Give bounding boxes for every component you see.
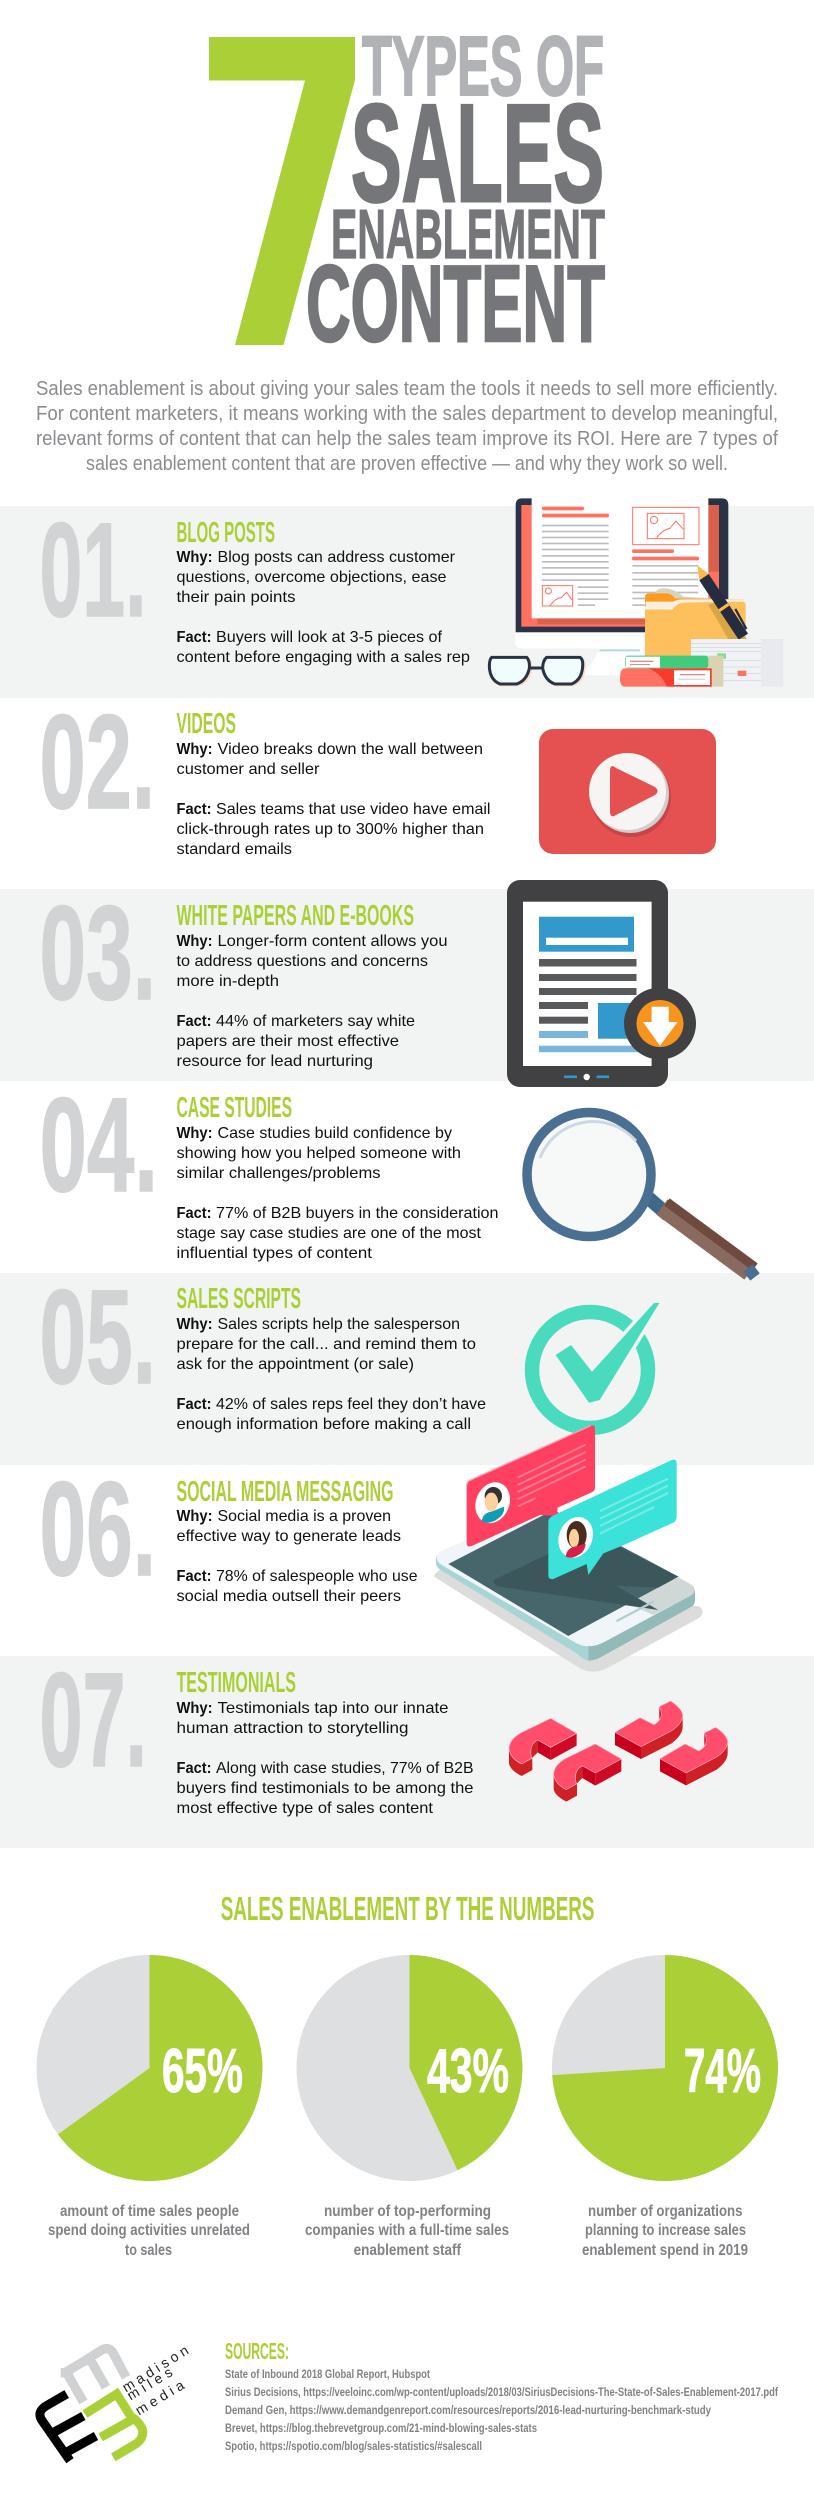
fact text: Fact: xyxy=(176,1205,212,1222)
heading: white papers and e-books: WHITE PAPERS AND E-BOOKS xyxy=(176,900,414,932)
why text: Why: xyxy=(176,1508,212,1525)
heading: sales scripts: SALES SCRIPTS xyxy=(176,1283,301,1315)
icon: blog monitor with folder, books and glasses xyxy=(489,497,783,687)
title line: enablement: ENABLEMENT xyxy=(331,195,605,273)
why text: Social media is a proven xyxy=(218,1508,391,1525)
pie chart: 43%: 43% xyxy=(427,2037,509,2106)
heading: testimonials: TESTIMONIALS xyxy=(176,1667,296,1699)
fact text: standard emails xyxy=(176,841,292,858)
caption: 74%: number of organizations xyxy=(588,2203,743,2220)
why text xyxy=(176,1508,401,1545)
caption: 43% xyxy=(305,2203,509,2259)
why text xyxy=(176,1700,449,1737)
why text xyxy=(176,549,456,606)
why text: Case studies build confidence by xyxy=(218,1125,452,1142)
icon: video play button xyxy=(539,729,716,854)
panel: blog posts xyxy=(40,496,470,666)
red chat bubble xyxy=(467,1425,595,1546)
panel: testimonials xyxy=(40,1646,474,1817)
sources: State of Inbound 2018 Global Report, Hubspot xyxy=(225,2369,430,2381)
number 01: 01. xyxy=(40,496,146,645)
fact text: social media outsell their peers xyxy=(176,1588,401,1605)
icon: check mark in circle xyxy=(532,1303,659,1428)
why text: Why: xyxy=(176,1700,212,1717)
why text xyxy=(176,1125,461,1182)
why text: effective way to generate leads xyxy=(176,1528,401,1545)
fact text: most effective type of sales content xyxy=(176,1800,434,1817)
intro text: Sales enablement is about giving your sales team the tools it needs to sell more efficiently. xyxy=(36,378,778,400)
intro text: For content marketers, it means working with the sales department to develop meaningful, xyxy=(36,403,778,425)
number 03: 03. xyxy=(40,879,156,1028)
number 07: 07. xyxy=(40,1646,147,1795)
why text: showing how you helped someone with xyxy=(176,1145,461,1162)
caption: 65% xyxy=(48,2203,250,2259)
logo: madison miles media: madison xyxy=(119,2342,191,2395)
why text: to address questions and concerns xyxy=(176,953,428,970)
why text: Why: xyxy=(176,549,212,566)
sources: Demand Gen, https://www.demandgenreport.com/resources/reports/2016-lead-nurturing-benchmark-study xyxy=(225,2405,712,2417)
why text: similar challenges/problems xyxy=(176,1165,380,1182)
sources xyxy=(225,2338,778,2453)
fact text xyxy=(176,1396,486,1433)
caption: 65%: spend doing activities unrelated xyxy=(48,2222,250,2239)
fact text: Fact: xyxy=(176,629,212,646)
title numeral 7 xyxy=(209,37,355,345)
why text xyxy=(176,741,483,778)
fact text: stage say case studies are one of the most xyxy=(176,1225,482,1242)
icon: phone with chat bubbles xyxy=(434,1425,703,1672)
intro text: sales enablement content that are proven effective — and why they work so well. xyxy=(86,453,728,475)
caption: 74%: planning to increase sales xyxy=(585,2222,746,2239)
heading: videos: VIDEOS xyxy=(176,708,236,740)
why text: customer and seller xyxy=(176,761,320,778)
fact text: 44% of marketers say white xyxy=(216,1013,415,1030)
fact text xyxy=(176,1205,498,1262)
title xyxy=(209,19,605,365)
why text: Longer-form content allows you xyxy=(218,933,448,950)
why text: more in-depth xyxy=(176,973,279,990)
number 05: 05. xyxy=(40,1263,156,1412)
why text: Blog posts can address customer xyxy=(218,549,456,566)
sources heading: SOURCES: xyxy=(225,2338,289,2364)
why text: Testimonials tap into our innate xyxy=(218,1700,449,1717)
fact text: Fact: xyxy=(176,1396,212,1413)
fact text xyxy=(176,1568,418,1605)
intro text: relevant forms of content that can help the sales team improve its ROI. Here are 7 types of xyxy=(36,428,778,450)
why text: Why: xyxy=(176,741,212,758)
fact text: 77% of B2B buyers in the consideration xyxy=(216,1205,498,1222)
caption: 43%: number of top-performing xyxy=(324,2203,491,2220)
why text: Why: xyxy=(176,1316,212,1333)
why text: prepare for the call... and remind them to xyxy=(176,1336,476,1353)
panel: social media messaging xyxy=(40,1455,418,1605)
title line: types of: TYPES OF xyxy=(362,19,604,113)
panel: case studies xyxy=(40,1071,498,1262)
fact text: papers are their most effective xyxy=(176,1033,399,1050)
logo: madison miles media xyxy=(40,2342,191,2461)
why text: human attraction to storytelling xyxy=(176,1720,408,1737)
fact text: Sales teams that use video have email xyxy=(216,801,490,818)
fact text: Fact: xyxy=(176,801,212,818)
fact text: resource for lead nurturing xyxy=(176,1053,373,1070)
caption: 65%: amount of time sales people xyxy=(60,2203,239,2220)
pie chart: 65%: 65% xyxy=(162,2037,243,2106)
icon: magnifying glass xyxy=(527,1112,755,1277)
heading: social media messaging: SOCIAL MEDIA MESSAGING xyxy=(176,1476,394,1508)
why text: Video breaks down the wall between xyxy=(218,741,483,758)
icon: quotation marks xyxy=(509,1701,728,1802)
caption: 65%: to sales xyxy=(125,2242,172,2259)
why text: Why: xyxy=(176,1125,212,1142)
fact text xyxy=(176,1760,474,1817)
teal chat bubble xyxy=(548,1460,677,1579)
logo: madison miles media: miles xyxy=(124,2364,175,2403)
logo: madison miles media: media xyxy=(132,2377,187,2418)
caption: 43%: companies with a full-time sales xyxy=(305,2222,509,2239)
pie chart: 43% xyxy=(296,1955,522,2181)
fact text: Fact: xyxy=(176,1760,212,1777)
fact text xyxy=(176,1013,415,1070)
sources: Brevet, https://blog.thebrevetgroup.com/21-mind-blowing-sales-stats xyxy=(225,2423,537,2435)
fact text: influential types of content xyxy=(176,1245,373,1262)
caption: 74%: enablement spend in 2019 xyxy=(582,2242,748,2259)
panel: white papers and e-books xyxy=(40,879,448,1070)
title line: sales: SALES xyxy=(351,76,604,231)
heading: blog posts: BLOG POSTS xyxy=(176,517,275,549)
caption: 74% xyxy=(582,2203,748,2259)
number 02: 02. xyxy=(40,688,155,837)
fact text: Fact: xyxy=(176,1568,212,1585)
panel backgrounds xyxy=(0,506,814,1848)
why text xyxy=(176,933,448,990)
why text: their pain points xyxy=(176,589,296,606)
why text xyxy=(176,1316,476,1373)
fact text: 42% of sales reps feel they don’t have xyxy=(216,1396,486,1413)
fact text: enough information before making a call xyxy=(176,1416,471,1433)
icon: tablet with download badge xyxy=(507,880,696,1087)
fact text: Buyers will look at 3-5 pieces of xyxy=(216,629,443,646)
fact text: buyers find testimonials to be among the xyxy=(176,1780,474,1797)
fact text xyxy=(176,801,490,858)
pie chart: 74%: 74% xyxy=(684,2037,761,2106)
fact text: click-through rates up to 300% higher than xyxy=(176,821,484,838)
fact text: Along with case studies, 77% of B2B xyxy=(216,1760,474,1777)
panel: sales scripts xyxy=(40,1263,486,1433)
sources: Spotio, https://spotio.com/blog/sales-statistics/#salescall xyxy=(225,2441,482,2453)
why text: Why: xyxy=(176,933,212,950)
fact text: content before engaging with a sales rep xyxy=(176,649,470,666)
number 06: 06. xyxy=(40,1455,156,1604)
pie chart: 65% xyxy=(36,1955,262,2181)
fact text xyxy=(176,629,470,666)
caption: 43%: enablement staff xyxy=(354,2242,462,2259)
why text: questions, overcome objections, ease xyxy=(176,569,447,586)
heading: case studies: CASE STUDIES xyxy=(176,1092,292,1124)
pie chart: 74% xyxy=(552,1955,778,2181)
why text: Sales scripts help the salesperson xyxy=(218,1316,460,1333)
intro text xyxy=(36,378,778,475)
fact text: 78% of salespeople who use xyxy=(216,1568,418,1585)
number 04: 04. xyxy=(40,1071,158,1220)
panel: videos xyxy=(40,688,490,858)
why text: ask for the appointment (or sale) xyxy=(176,1356,414,1373)
fact text: Fact: xyxy=(176,1013,212,1030)
